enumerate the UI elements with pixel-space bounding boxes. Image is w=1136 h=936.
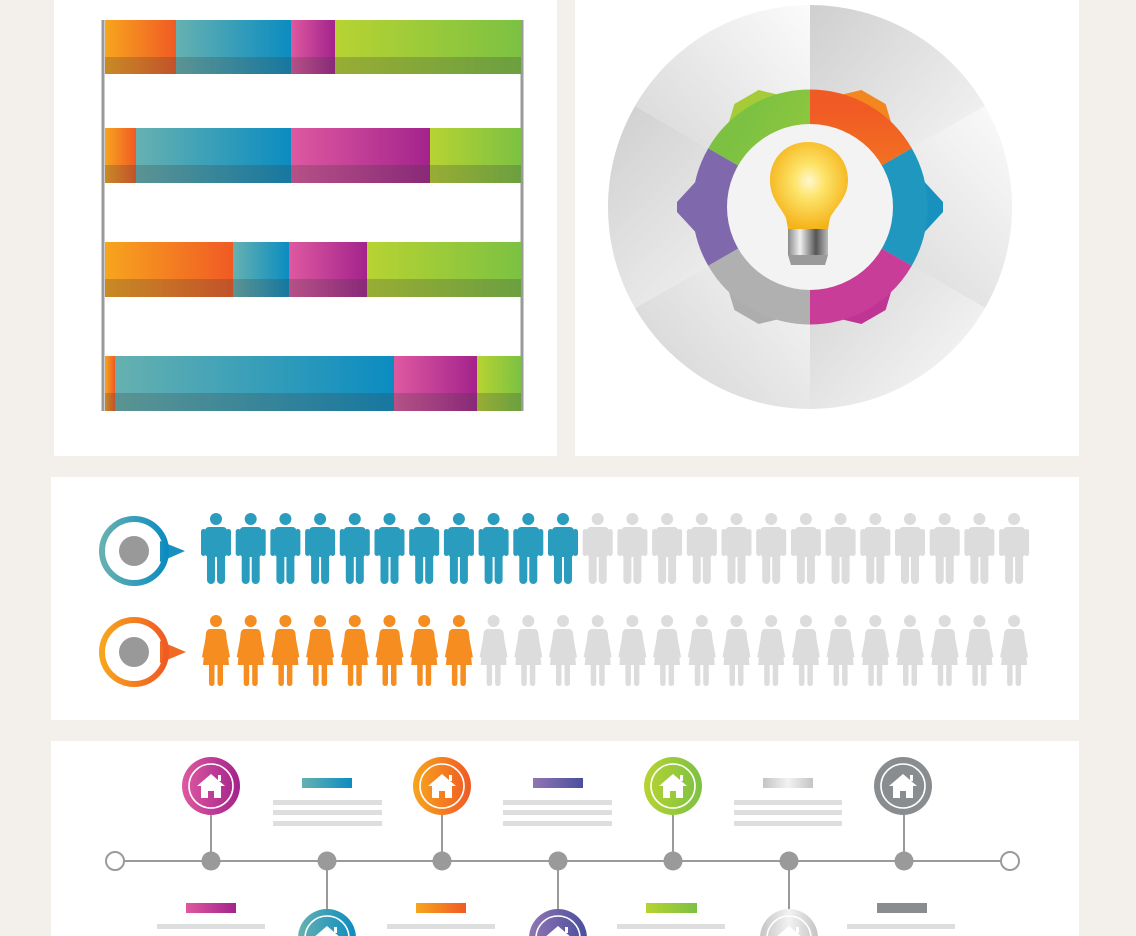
women pictogram row (202, 615, 1028, 686)
icon: house silver (760, 909, 818, 936)
bar chart axes (103, 20, 522, 411)
men pictogram row (201, 513, 1029, 584)
icon: light bulb (770, 142, 848, 265)
icon: house purple (529, 909, 587, 936)
panel: people (51, 477, 1079, 720)
timeline line and nodes (106, 815, 1019, 910)
panel: bar chart (54, 0, 557, 456)
callout: women (102, 620, 186, 684)
bar row 4 (105, 356, 521, 411)
icon: house green (644, 757, 702, 815)
panel: gear diagram (575, 0, 1079, 456)
icon: house orange (413, 757, 471, 815)
text block placeholders top (273, 778, 842, 826)
panel: timeline (51, 741, 1079, 936)
icon: house magenta (182, 757, 240, 815)
icon: house gray (874, 757, 932, 815)
bar row 1 (105, 20, 521, 74)
callout: men (102, 519, 185, 583)
icon: house teal (298, 909, 356, 936)
gear ring (673, 70, 947, 344)
text block placeholders bottom (157, 903, 955, 929)
bar row 3 (105, 242, 521, 297)
pie slices (608, 5, 1012, 409)
bar row 2 (105, 128, 521, 183)
